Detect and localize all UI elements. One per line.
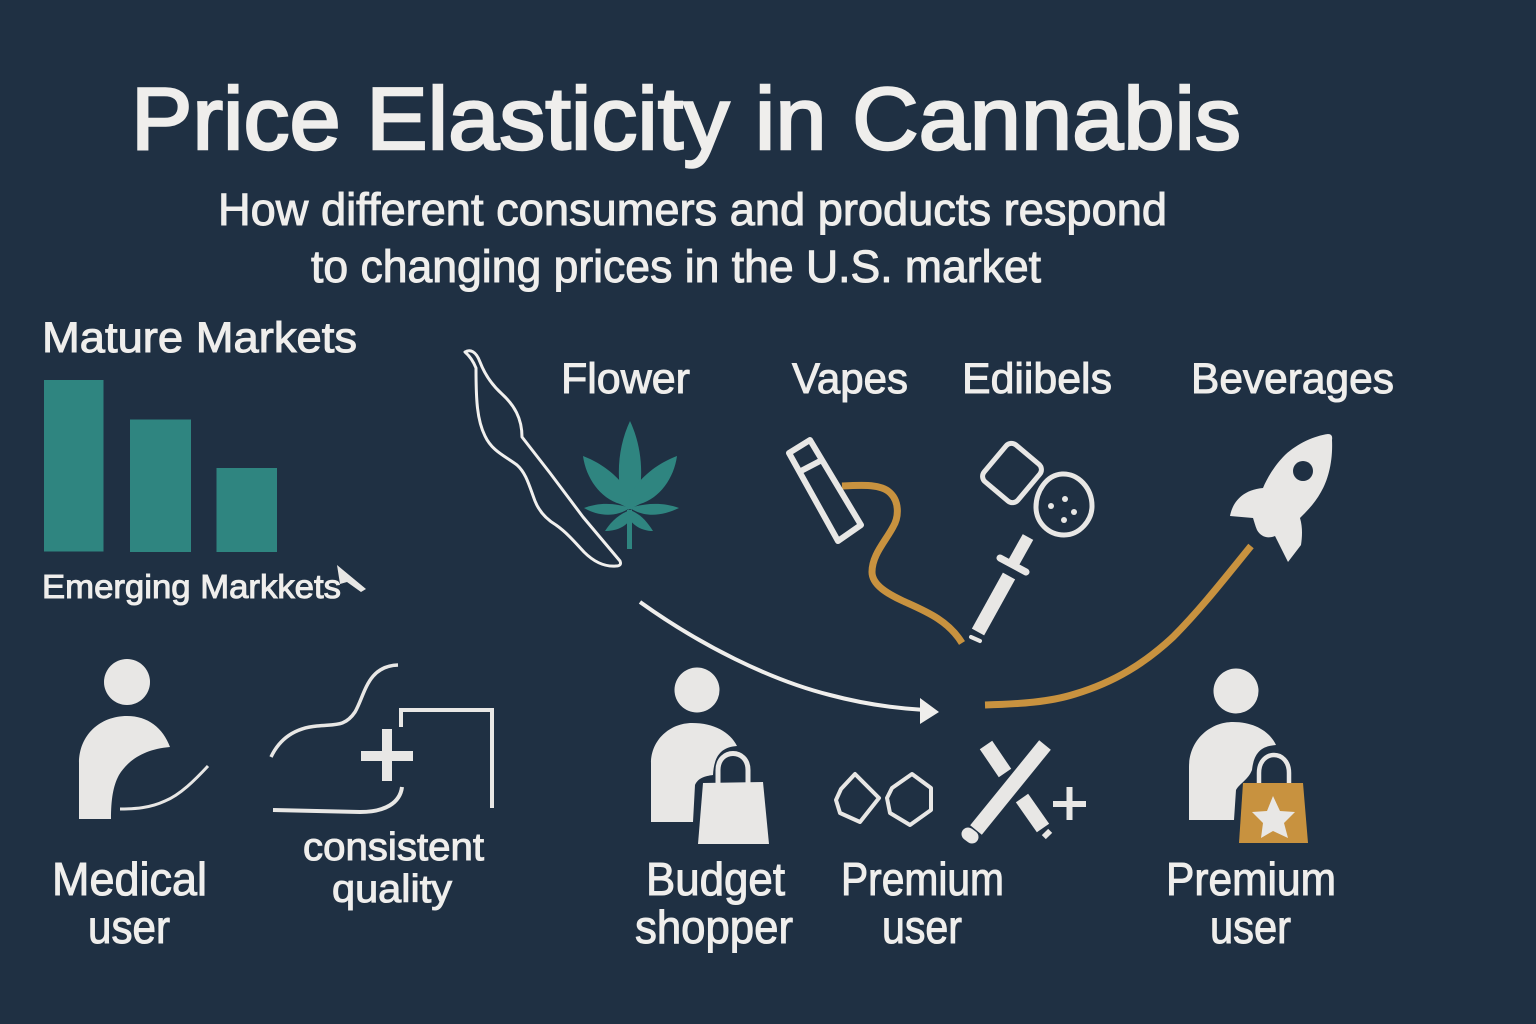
label: medical user: user: [88, 901, 170, 953]
icon: quality curves and plus: [271, 665, 492, 812]
label: consistent quality: consistent: [303, 826, 484, 869]
icon: gems: [836, 774, 931, 825]
heading: emerging markets: Emerging Markkets: [42, 568, 341, 605]
icon: crossed sticks and plus: [968, 745, 1086, 837]
subtitle: to changing prices in the U.S. market: [311, 241, 1041, 292]
orange squiggle curve: [842, 485, 962, 643]
label: edibles: Ediibels: [962, 355, 1112, 403]
icon: cannabis leaf: [583, 421, 679, 549]
label: budget shopper: shopper: [635, 901, 793, 953]
heading: mature markets: Mature Markets: [42, 314, 357, 362]
label: premium user: Premium: [841, 853, 1004, 905]
label: flower: Flower: [561, 355, 690, 403]
label: beverages: Beverages: [1191, 355, 1394, 403]
label: premium user: [841, 853, 1004, 953]
orange growth curve: [985, 546, 1251, 705]
icon: small pointer: [337, 565, 366, 592]
subtitle: How different consumers and products respond: [218, 184, 1167, 235]
label: premium user right: user: [1210, 901, 1291, 953]
label: medical user: [52, 853, 207, 953]
label: premium user right: [1166, 853, 1336, 953]
bar chart: [44, 380, 277, 552]
label: vapes: Vapes: [792, 355, 908, 403]
label: premium user right: Premium: [1166, 853, 1336, 905]
icon: rocket: [1230, 434, 1332, 562]
label: budget shopper: Budget: [646, 853, 785, 905]
label: budget shopper: [635, 853, 793, 953]
label: medical user: Medical: [52, 853, 207, 905]
icon: vape pen: [789, 440, 861, 541]
icon: cookie: [1036, 474, 1092, 535]
label: premium user: user: [882, 901, 962, 953]
icon: leaf outline: [465, 351, 620, 566]
icon: dropper: [971, 537, 1028, 641]
icon: budget shopper: [651, 668, 769, 844]
label: consistent quality: quality: [332, 868, 453, 911]
title: Price Elasticity in Cannabis: [131, 69, 1241, 168]
arrow: [640, 602, 939, 724]
icon: premium shopper: [1189, 668, 1308, 843]
label: consistent quality: [303, 826, 484, 911]
icon: medical user: [79, 659, 208, 819]
icon: square edible: [980, 440, 1044, 506]
subtitle: [218, 184, 1167, 292]
